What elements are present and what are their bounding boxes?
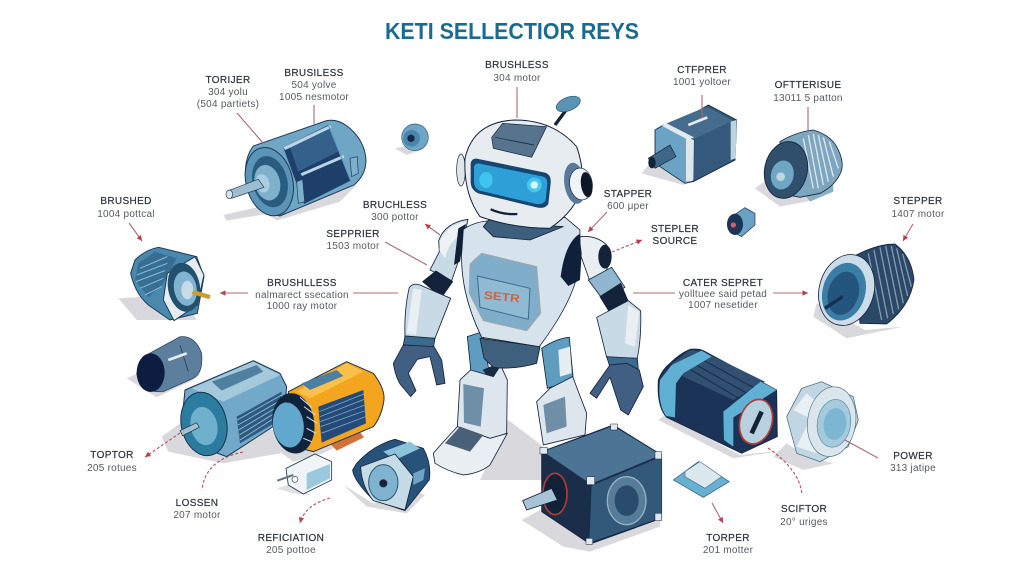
label: bruchless: BRUCHLESS <box>363 200 427 211</box>
label: brushless top <box>485 60 549 84</box>
label: ctfprer: CTFPRER <box>677 65 727 76</box>
label: torper: TORPER <box>706 533 750 544</box>
label: cater sepret: 1007 nesetider <box>688 300 758 311</box>
label: toptor: 205 rotues <box>87 463 137 474</box>
motor: small round part <box>395 124 428 155</box>
label: brushed <box>97 196 155 220</box>
label: ctfprer: 1001 yoltoer <box>673 77 731 88</box>
motor: large brushless top left <box>223 120 366 221</box>
label: brushless top: BRUSHLESS <box>485 60 549 71</box>
label: power <box>890 451 936 474</box>
label: bruchless: 300 pottor <box>371 212 419 223</box>
motor: dark gearbox <box>522 424 662 552</box>
robot: right arm <box>561 234 643 415</box>
label: toptor: TOPTOR <box>90 450 134 461</box>
robot: left arm <box>393 219 468 397</box>
motor: small chip <box>673 462 729 497</box>
label: torper <box>703 533 754 556</box>
robot: chest plate: SETR <box>483 290 520 305</box>
motor: small cylinder <box>127 337 202 397</box>
label: brushed: BRUSHED <box>100 196 152 207</box>
label: sepprier: SEPPRIER <box>326 229 380 240</box>
label: cater sepret: yolltuee said petad <box>679 289 767 300</box>
motor: silver disc motor <box>773 382 860 470</box>
label: brusiless <box>279 68 349 103</box>
title: KETI SELLECTIOR REYS <box>385 18 639 44</box>
connector lines and arrows <box>129 87 913 523</box>
label: stepler source: STEPLER <box>651 224 699 235</box>
label: sciftor: SCIFTOR <box>781 504 827 515</box>
label: brusiless: 504 yolve <box>291 80 337 91</box>
label: stapper: STAPPER <box>604 189 652 200</box>
label: power: 313 jatipe <box>890 463 936 474</box>
label: stepler source <box>651 224 699 247</box>
label: toptor <box>87 450 137 474</box>
label: torijer: TORIJER <box>205 75 251 86</box>
motor: stepper box top right <box>642 105 737 185</box>
label: ctfprer <box>673 65 731 88</box>
label: ofterisue: 13011 5 patton <box>773 93 843 104</box>
label: torijer: 304 yolu <box>208 87 248 98</box>
label: brushlless <box>255 278 349 312</box>
label: brusiless: 1005 nesmotor <box>279 92 349 103</box>
robot: pelvis <box>480 338 540 368</box>
motor: big stepper right <box>810 244 914 338</box>
label: brushless top: 304 motor <box>493 73 541 84</box>
label: brushed: 1004 pottcal <box>97 209 155 220</box>
label: stapper <box>604 189 652 212</box>
label: bruchless <box>363 200 427 223</box>
label: sciftor: 20° uriges <box>780 517 828 528</box>
label: ofterisue <box>773 80 843 104</box>
label: lossen <box>173 498 221 521</box>
label: stepper right: 1407 motor <box>891 209 945 220</box>
robot: right leg <box>537 337 587 445</box>
motor: orange fin motor <box>263 362 384 462</box>
robot: left leg <box>433 332 507 475</box>
label: torijer: (504 partiets) <box>197 99 259 110</box>
label: brushlless: BRUSHLLESS <box>267 278 337 289</box>
motor: finned motor top right <box>755 130 842 207</box>
robot: torso <box>462 217 580 347</box>
motor: blue gear motor <box>343 439 430 513</box>
robot: head <box>457 93 594 240</box>
motor: brushed left <box>118 247 211 321</box>
label: sciftor <box>780 504 828 528</box>
label: stepler source: SOURCE <box>653 236 697 247</box>
label: lossen: 207 motor <box>173 510 221 521</box>
label: reficiation: REFICIATION <box>258 533 324 544</box>
robot: floor shadow <box>480 420 543 480</box>
label: power: POWER <box>893 451 933 462</box>
label: torijer <box>197 75 259 110</box>
robot: chest plate <box>469 253 541 331</box>
motor: blue fin motor <box>162 361 287 463</box>
label: ofterisue: OFTTERISUE <box>775 80 841 91</box>
label: reficiation <box>258 533 324 556</box>
robot <box>393 93 643 480</box>
label: cater sepret <box>679 278 767 311</box>
label: cater sepret: CATER SEPRET <box>683 278 763 289</box>
label: reficiation: 205 pottoe <box>266 545 316 556</box>
label: brushlless: nalmarect ssecation <box>255 290 349 301</box>
label: lossen: LOSSEN <box>176 498 218 509</box>
label: stapper: 600 μper <box>607 201 649 212</box>
motor: dark blue motor lower right <box>658 349 787 458</box>
label: stepper right <box>891 196 945 220</box>
label: stepper right: STEPPER <box>893 196 943 207</box>
motor: small stepper part <box>727 208 755 237</box>
label: brusiless: BRUSILESS <box>284 68 344 79</box>
motor: small white device <box>277 454 332 495</box>
label: sepprier <box>326 229 380 252</box>
label: sepprier: 1503 motor <box>326 241 380 252</box>
label: brushlless: 1000 ray motor <box>267 301 338 312</box>
label: torper: 201 motter <box>703 545 754 556</box>
